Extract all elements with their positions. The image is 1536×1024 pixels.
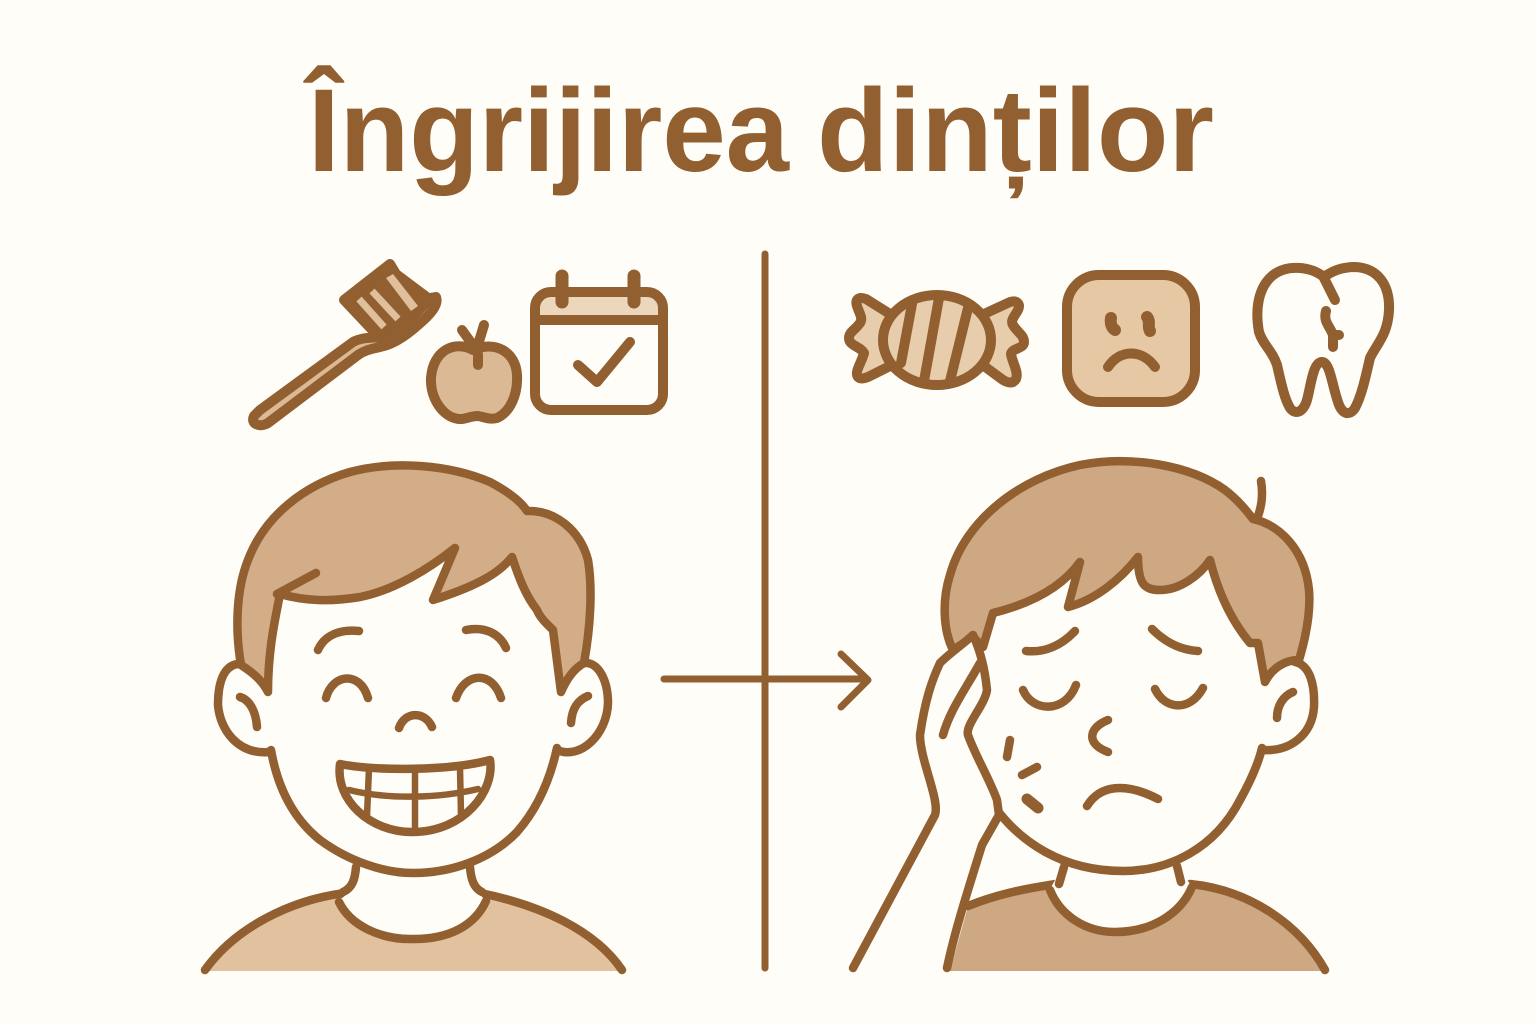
collar and neck bbox=[339, 867, 486, 939]
hair bbox=[945, 461, 1309, 682]
hand and arm bbox=[853, 635, 999, 968]
title bbox=[303, 64, 1214, 199]
title: dinților bbox=[817, 65, 1214, 199]
ears bbox=[218, 663, 608, 752]
collar lines bbox=[339, 867, 486, 939]
icon: apple bbox=[431, 325, 517, 419]
jaw line bbox=[997, 748, 1262, 871]
icon: cracked tooth bbox=[1257, 267, 1389, 413]
collar lines bbox=[1050, 866, 1192, 932]
ear bbox=[1262, 662, 1314, 750]
divider line bbox=[762, 254, 768, 968]
jaw line bbox=[271, 748, 557, 873]
shirt bbox=[205, 893, 622, 971]
brows, eyes, nose, mouth bbox=[1023, 629, 1203, 806]
shirt bbox=[950, 884, 1325, 971]
icon: calendar bbox=[535, 276, 663, 410]
brows, eyes, nose bbox=[318, 629, 506, 728]
sad boy bbox=[853, 461, 1325, 971]
pimples bbox=[1007, 740, 1038, 808]
hair bbox=[237, 465, 591, 692]
arrow bbox=[664, 654, 868, 707]
collar and neck bbox=[1050, 866, 1192, 932]
icon: candy bbox=[849, 295, 1024, 385]
smile with teeth bbox=[340, 760, 491, 832]
title: Îngrijirea bbox=[303, 64, 790, 197]
happy boy bbox=[205, 465, 622, 971]
icon: sad face square bbox=[1067, 275, 1195, 402]
icon: toothbrush bbox=[253, 264, 437, 425]
